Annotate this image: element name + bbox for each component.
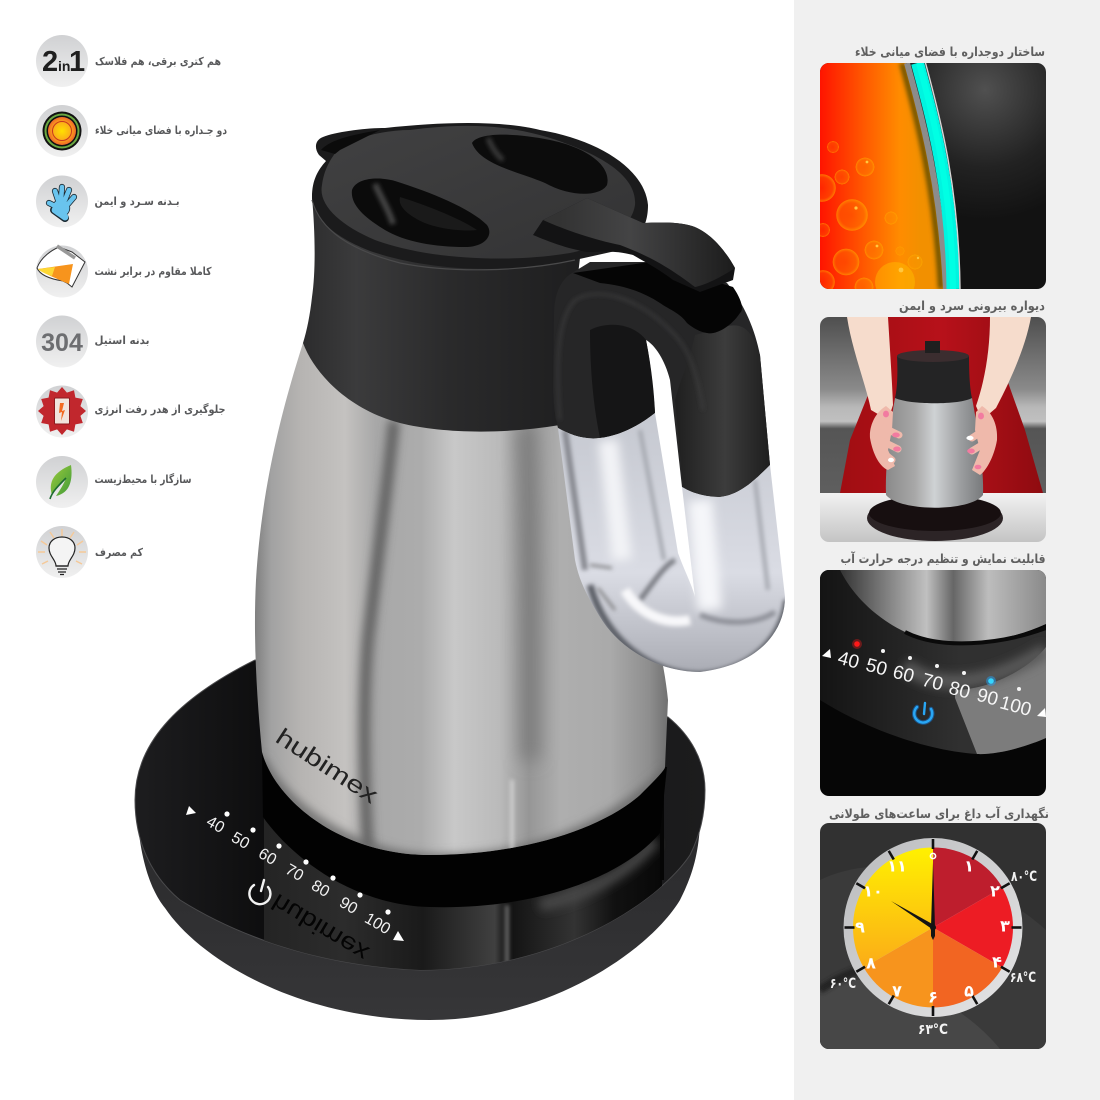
- glass reflection: [264, 797, 664, 970]
- panel title: double wall: ساختار دوجداره با فضای میانی خلاء: [855, 44, 1045, 59]
- panel: temperature control closeup: [820, 570, 1046, 796]
- scale markers: 100: [997, 692, 1033, 721]
- temperature labels: [830, 869, 1037, 1038]
- panel title: long heat retention: نگهداری آب داغ برای ساعت‌های طولانی: [829, 806, 1049, 821]
- feature: eco friendly: سازگار با محیط‌زیست: [94, 473, 192, 486]
- feature: 304 steel: بدنه استیل: [94, 334, 150, 347]
- temperature labels: ۶۸°C: [1010, 970, 1036, 986]
- arms and hands: [847, 317, 1031, 475]
- scale markers: [822, 639, 1046, 721]
- mini kettle: [867, 341, 1003, 541]
- temperature scale on base: 50: [228, 829, 252, 853]
- temperature scale on base: 60: [255, 845, 279, 869]
- lid opening right: [472, 135, 608, 194]
- black ring under body: [262, 752, 667, 907]
- clock numerals: ۲: [990, 882, 1000, 900]
- feature list: [36, 35, 227, 578]
- base skirt: [138, 825, 700, 1020]
- panel title: cool wall: دیواره بیرونی سرد و ایمن: [899, 298, 1045, 313]
- clock numerals: ۳: [1000, 916, 1010, 936]
- fingernails: [883, 411, 984, 469]
- scale markers: 80: [946, 678, 972, 704]
- scale markers: 60: [890, 662, 916, 688]
- logo on body: hubimex: [271, 723, 383, 809]
- clock numerals: ۱۰: [863, 882, 883, 900]
- product: kettle with base: [135, 123, 787, 1020]
- feature: double wall: دو جـداره با فضای میانی خلاء: [95, 124, 227, 137]
- feature: 304 steel: [36, 316, 150, 368]
- base glass top: [135, 660, 705, 970]
- feature: double wall: [36, 105, 227, 157]
- lid opening left: [352, 178, 489, 247]
- scale markers: 70: [919, 670, 945, 696]
- temperature scale on base: 90: [336, 894, 360, 918]
- temperature labels: ۶۳°C: [918, 1022, 948, 1038]
- feature: leak proof: کاملا مقاوم در برابر نشت: [94, 265, 212, 278]
- handle: [553, 262, 770, 497]
- panel: double wall structure: [820, 63, 1046, 289]
- black collar: [303, 190, 580, 432]
- feature: 2 in 1: هم کتری برقی، هم فلاسک: [95, 55, 221, 68]
- lid latch: [533, 198, 735, 292]
- temperature scale on base: 100: [361, 910, 393, 938]
- clock numerals: ۷: [892, 982, 902, 1000]
- dress: [840, 317, 1043, 493]
- temperature labels: ۸۰°C: [1011, 869, 1037, 885]
- clock numerals: ۵: [964, 982, 974, 1000]
- feature: 2 in 1: 2: [42, 46, 58, 78]
- clock numerals: ۴: [992, 952, 1002, 972]
- feature: 2 in 1: 1: [69, 46, 85, 78]
- feature: energy saving: جلوگیری از هدر رفت انرژی: [94, 403, 226, 416]
- feature: low consumption: کم مصرف: [95, 546, 144, 559]
- feature: 304 steel: 304: [41, 329, 83, 357]
- clock numerals: ۱: [964, 856, 974, 876]
- clock: [844, 838, 1022, 1017]
- feature: 2 in 1: [36, 35, 221, 87]
- scale markers: 90: [974, 685, 1000, 711]
- panel: heat retention clock: [820, 823, 1046, 1049]
- panel title: temperature display: قابلیت نمایش و تنظیم درجه حرارت آب: [840, 551, 1046, 566]
- scale markers: 50: [863, 655, 889, 681]
- power icon on base: [249, 880, 270, 904]
- clock numerals: ۰: [931, 852, 935, 860]
- lid: [312, 123, 648, 270]
- temperature labels: ۶۰°C: [830, 976, 856, 992]
- panel: cool outer wall photo: [820, 317, 1046, 542]
- scale markers: 40: [835, 648, 861, 674]
- feature: eco friendly: [36, 456, 192, 508]
- table: [820, 493, 1046, 542]
- clock numerals: ۱۱: [887, 856, 907, 876]
- temperature scale on base: 40: [203, 813, 227, 837]
- transparent water gauge: [558, 413, 787, 675]
- clock numerals: ۹: [855, 918, 865, 936]
- temperature scale on base: 70: [282, 861, 306, 885]
- bubbles: [820, 141, 922, 289]
- feature: cool body: بـدنه سـرد و ایمن: [94, 195, 180, 208]
- clock numerals: ۶: [928, 988, 938, 1006]
- temperature scale on base: 80: [308, 877, 332, 901]
- feature: low consumption: [36, 526, 144, 578]
- feature: cool body: [36, 176, 180, 228]
- feature: leak proof: [36, 246, 212, 298]
- temperature scale on base: [186, 806, 404, 941]
- clock numerals: ۸: [866, 954, 876, 972]
- clock hands: [891, 862, 936, 940]
- stainless steel body: [255, 343, 670, 860]
- clock numerals: [855, 852, 1010, 1006]
- reflected logo on glass: hubimex: [267, 888, 374, 967]
- blue power icon: [914, 703, 932, 723]
- feature: 2 in 1: in: [58, 58, 70, 74]
- sidebar background: [794, 0, 1100, 1100]
- feature: energy saving: [36, 386, 226, 438]
